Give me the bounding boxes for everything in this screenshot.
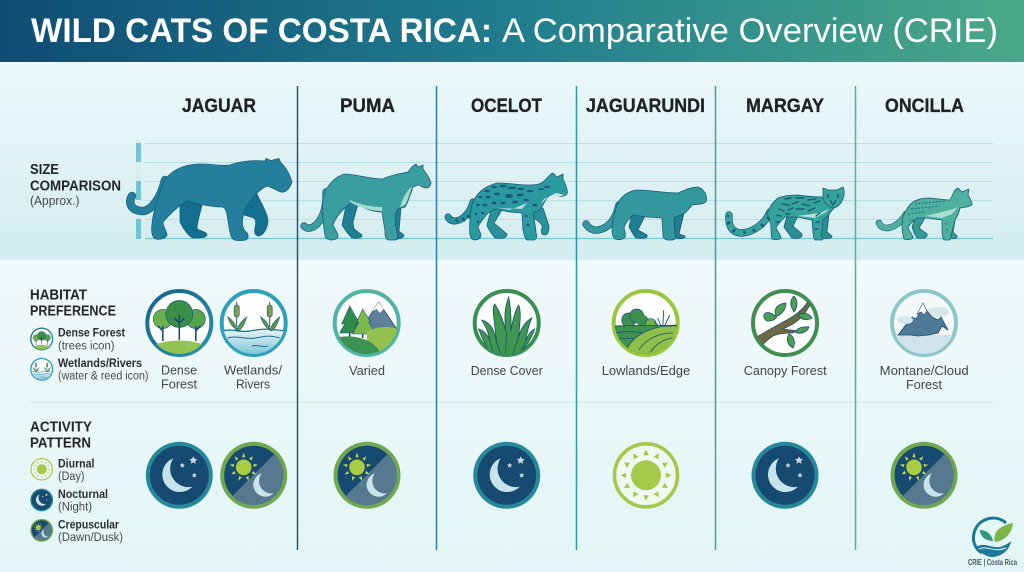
jaguarundi silhouette [586,187,707,240]
margay silhouette [727,187,844,240]
column headings: JAGUARUNDI [586,96,705,117]
habitat: jaguar wetlands: Rivers [236,377,270,392]
column headings [182,96,964,117]
habitat: oncilla montane: Forest [906,377,942,392]
activity: jaguar nocturnal [146,442,213,509]
column headings: JAGUAR [182,96,256,117]
header banner [0,0,1024,62]
subtitle: A Comparative Overview (CRIE) [502,12,998,50]
legend: wetlands: Wetlands/Rivers [58,358,142,370]
habitat preference label [30,288,116,320]
legend: dense forest: (trees icon) [58,340,115,352]
title: WILD CATS OF COSTA RICA: [31,12,492,50]
page background lower [0,260,1024,572]
legend: diurnal: (Day) [58,471,85,483]
size comparison label: COMPARISON [30,178,121,194]
habitat: puma varied: Varied [349,363,385,378]
habitat: ocelot dense cover [471,291,543,378]
habitat: jaguar dense forest: Forest [161,377,197,392]
habitat: puma varied [335,291,399,378]
habitat preference label: PREFERENCE [30,304,116,320]
ocelot silhouette [448,173,567,240]
activity pattern label: PATTERN [30,436,91,452]
habitat: margay canopy: Canopy Forest [744,363,827,378]
jaguar silhouette [130,158,292,241]
legend: wetlands: (water & reed icon) [58,371,149,383]
size comparison label: SIZE [30,162,59,178]
logo: CRIE Costa Rica [968,518,1017,567]
habitat: jaguarundi lowlands: Lowlands/Edge [602,363,690,378]
legend: crepuscular [30,519,123,544]
habitat: oncilla montane [880,291,969,392]
legend: dense forest: Dense Forest [58,328,125,340]
column headings: OCELOT [471,96,542,117]
legend: diurnal [31,458,95,483]
habitat: jaguar dense forest [147,291,211,392]
legend: crepuscular: Crepuscular [58,519,119,531]
habitat: jaguarundi lowlands [602,291,690,378]
habitat: jaguar wetlands [222,291,286,392]
size comparison label: (Approx.) [30,194,80,208]
activity pattern label: ACTIVITY [30,419,92,435]
oncilla silhouette [879,188,972,240]
activity: jaguar crepuscular [220,442,287,509]
legend: wetlands [31,358,149,383]
habitat: jaguar dense forest: Dense [161,363,197,378]
legend: crepuscular: (Dawn/Dusk) [58,532,123,544]
habitat: ocelot dense cover: Dense Cover [471,363,543,378]
column headings: PUMA [340,96,395,117]
legend: nocturnal: (Night) [58,502,92,514]
legend: diurnal: Diurnal [58,458,94,470]
column headings: ONCILLA [885,96,964,117]
size scale bar [136,139,141,240]
size comparison label [30,162,121,208]
puma silhouette [304,164,431,240]
habitat: jaguar wetlands: Wetlands/ [224,363,282,378]
activity: ocelot nocturnal [473,442,540,509]
legend: nocturnal [30,489,108,514]
column dividers [298,86,856,550]
activity: jaguarundi diurnal [614,444,678,507]
legend: nocturnal: Nocturnal [58,489,108,501]
size comparison band [0,62,1024,260]
activity: margay nocturnal [752,442,818,509]
activity: puma crepuscular [334,442,400,509]
habitat: margay canopy [744,291,827,378]
activity: oncilla crepuscular [890,442,958,509]
activity pattern label [30,419,92,452]
habitat preference label: HABITAT [30,288,87,304]
habitat: oncilla montane: Montane/Cloud [880,363,969,378]
legend: dense forest [31,328,125,352]
column headings: MARGAY [746,96,824,117]
